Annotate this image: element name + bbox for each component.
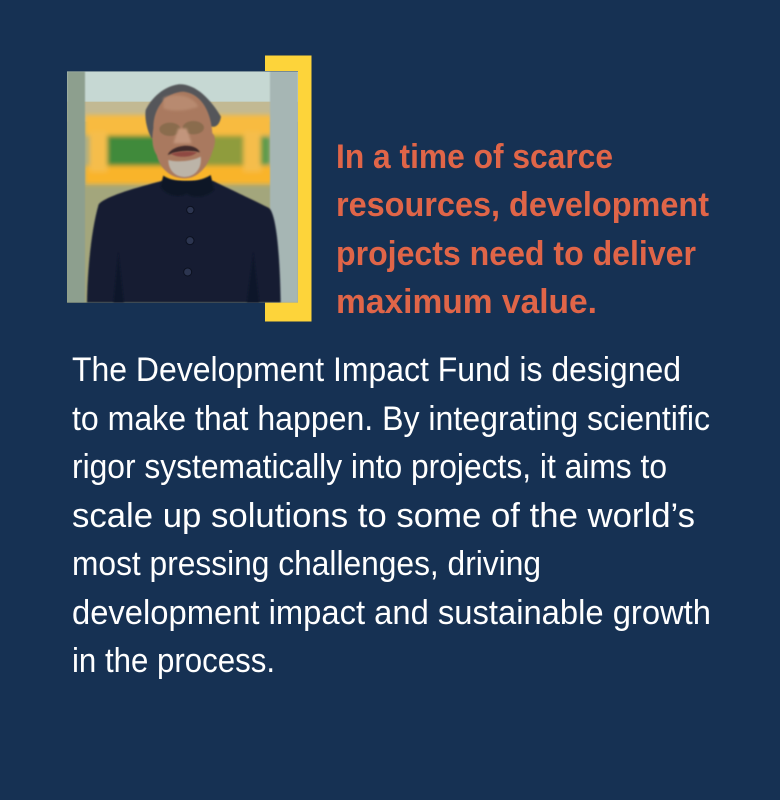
mustache bbox=[168, 146, 200, 155]
skin bbox=[152, 92, 215, 178]
hair bbox=[145, 84, 221, 138]
glasses bbox=[159, 123, 181, 136]
yellow bracket bbox=[265, 56, 312, 322]
body paragraph: rigor systematically into projects, it aims to bbox=[72, 448, 667, 486]
buttons bbox=[184, 206, 194, 276]
body paragraph: to make that happen. By integrating scientific bbox=[72, 400, 710, 438]
nose bbox=[173, 128, 192, 143]
heading: orange quote: maximum value. bbox=[336, 283, 597, 321]
beard bbox=[168, 157, 201, 177]
face bbox=[145, 84, 221, 178]
sleeve folds bbox=[113, 252, 259, 303]
body paragraph: in the process. bbox=[72, 642, 275, 680]
heading: orange quote: projects need to deliver bbox=[336, 235, 696, 273]
body paragraph bbox=[72, 351, 711, 680]
heading: orange quote: In a time of scarce bbox=[336, 138, 613, 176]
body paragraph: development impact and sustainable growth bbox=[72, 594, 711, 632]
mouth bbox=[171, 151, 197, 157]
body paragraph: scale up solutions to some of the world’s bbox=[72, 497, 695, 535]
heading: orange quote: resources, development bbox=[336, 186, 709, 224]
heading: orange quote bbox=[336, 138, 709, 321]
collar bbox=[160, 175, 214, 197]
body paragraph: The Development Impact Fund is designed bbox=[72, 351, 681, 389]
body paragraph: most pressing challenges, driving bbox=[72, 545, 541, 583]
photo: portrait of a man bbox=[67, 71, 298, 305]
jacket bbox=[87, 181, 281, 303]
